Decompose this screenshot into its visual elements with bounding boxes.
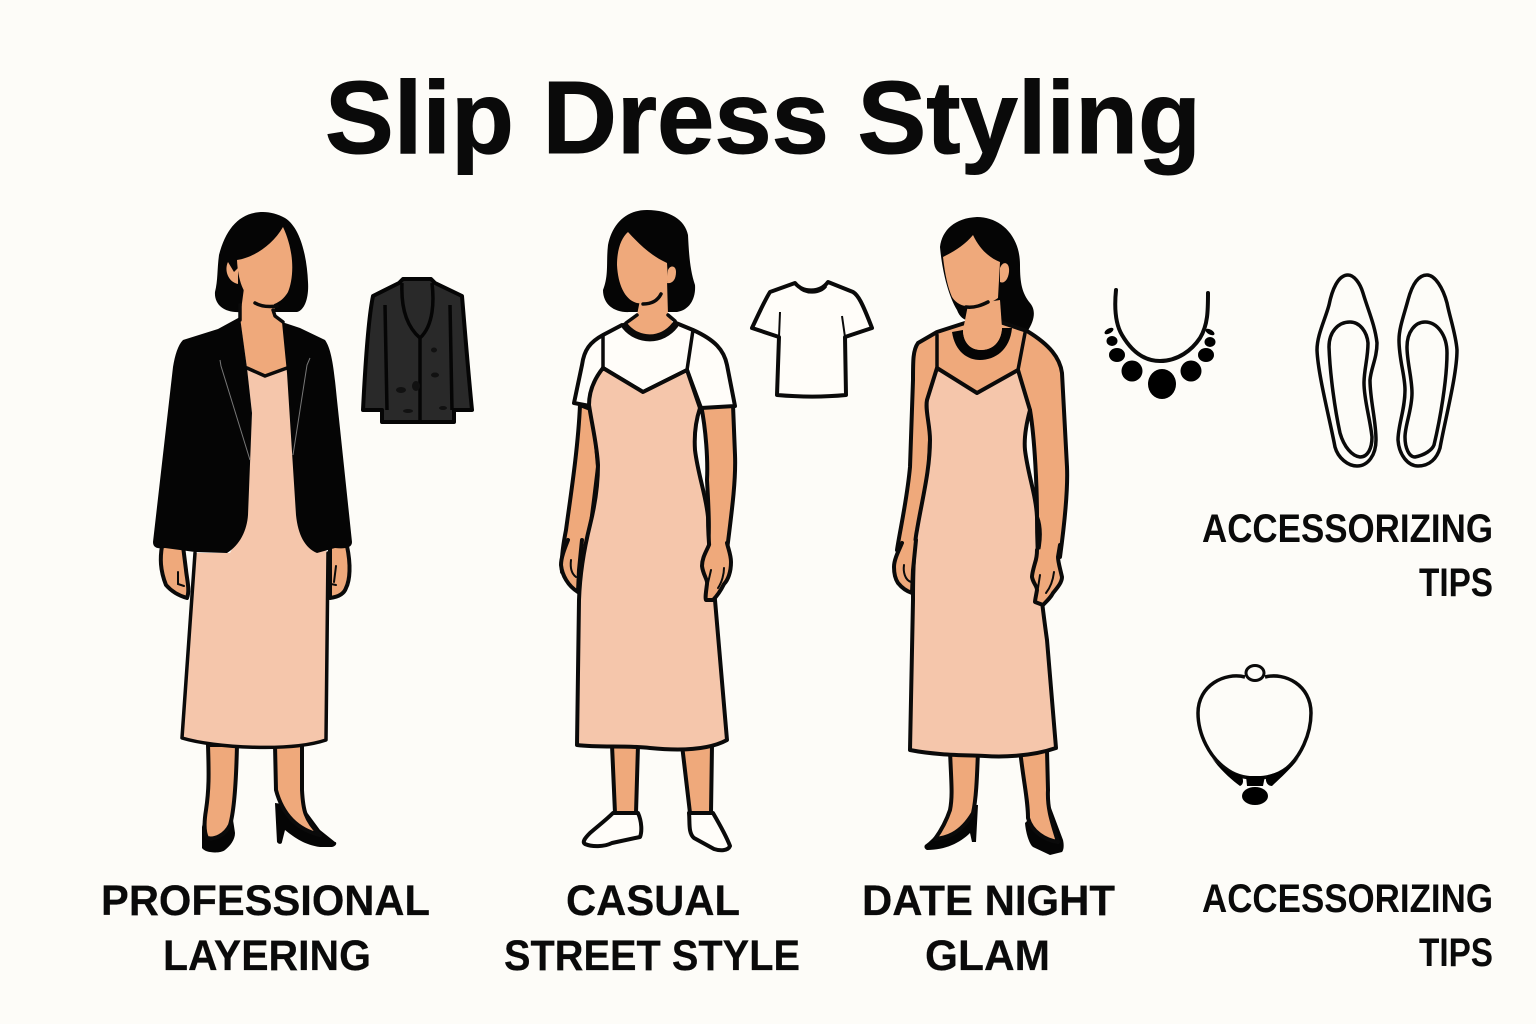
- t-shirt: [574, 323, 735, 408]
- icon: statement necklace: [1103, 290, 1216, 399]
- ear: [226, 262, 238, 284]
- right hand fingers: [331, 566, 336, 585]
- icon: pendant necklace: [1198, 666, 1311, 805]
- neck and chest: [240, 288, 287, 376]
- ear: [1000, 263, 1009, 283]
- left hand fingers: [178, 572, 184, 586]
- jaw line: [643, 294, 661, 304]
- lapels and seams: [385, 283, 452, 422]
- right hand: [702, 543, 731, 600]
- right hand fingers: [708, 568, 724, 588]
- slip dress: [577, 368, 727, 750]
- figure: professional layering: [153, 212, 352, 852]
- arms: [562, 405, 735, 572]
- face: [237, 227, 292, 305]
- face: [617, 232, 668, 303]
- left shoe: [1317, 275, 1377, 466]
- lapel highlights: [220, 358, 310, 460]
- body and arms: [897, 322, 1067, 560]
- right shoe: [1398, 275, 1457, 466]
- label: accessorizing tips lower: ACCESSORIZING: [1202, 877, 1493, 921]
- label: accessorizing tips lower: TIPS: [1419, 931, 1493, 975]
- label: date night glam: DATE NIGHT: [862, 877, 1115, 925]
- right hand: [1032, 545, 1062, 605]
- right pump: [275, 803, 336, 847]
- left hand: [561, 540, 582, 592]
- left leg: [935, 750, 978, 839]
- bead right outer: [1204, 337, 1216, 347]
- label: date night glam: [862, 877, 1115, 980]
- bead right top: [1204, 327, 1216, 337]
- right hand: [330, 546, 350, 598]
- bead left top: [1103, 326, 1115, 336]
- left hand: [161, 546, 188, 598]
- label: accessorizing tips upper: TIPS: [1419, 561, 1493, 605]
- label: date night glam: GLAM: [925, 932, 1050, 980]
- label: accessorizing tips lower: [1202, 877, 1493, 975]
- left hand fingers: [904, 565, 911, 582]
- title: Slip Dress Styling: [325, 60, 1201, 175]
- t-shirt collar: [625, 325, 675, 338]
- bead right inner: [1180, 360, 1202, 382]
- neck: [626, 280, 674, 335]
- jaw line: [255, 303, 277, 307]
- straps: [937, 333, 1025, 370]
- label: professional layering: [101, 877, 430, 980]
- left hand: [894, 540, 916, 593]
- icon: flat shoes: [1317, 275, 1457, 466]
- jacket left panel: [153, 317, 252, 553]
- label: accessorizing tips upper: [1202, 507, 1493, 605]
- necklace ring: [1198, 676, 1311, 778]
- figure: casual street style: [561, 210, 735, 850]
- neckline: [247, 368, 287, 376]
- left leg: [205, 745, 237, 838]
- clasp: [1246, 666, 1264, 680]
- bead left inner: [1122, 360, 1142, 382]
- pendant stone: [1242, 787, 1268, 805]
- dress skirt outline: [182, 553, 328, 747]
- dark marks: [396, 348, 447, 413]
- left pump: [202, 800, 235, 852]
- jaw line: [966, 302, 988, 307]
- dress: [182, 368, 328, 747]
- hair: [603, 210, 695, 312]
- neck outline: [240, 305, 283, 322]
- ear: [667, 266, 676, 283]
- neck: [963, 300, 1002, 350]
- bead right middle: [1198, 348, 1214, 362]
- slip dress: [910, 368, 1056, 756]
- neck outline: [626, 315, 675, 323]
- right heel: [1025, 800, 1064, 855]
- figure: date night glam: [894, 217, 1067, 855]
- jacket right panel: [282, 322, 352, 553]
- label: casual street style: CASUAL: [566, 877, 740, 925]
- straps: [603, 330, 693, 370]
- label: accessorizing tips upper: ACCESSORIZING: [1202, 507, 1493, 551]
- hair: [215, 212, 308, 312]
- beads: [1148, 369, 1176, 399]
- bead left middle: [1109, 348, 1125, 362]
- left heel: [924, 803, 978, 850]
- chain: [1115, 290, 1208, 361]
- icon: t-shirt: [752, 282, 872, 396]
- label: casual street style: [504, 877, 800, 980]
- bead left outer: [1106, 336, 1118, 346]
- label: professional layering: LAYERING: [163, 932, 371, 980]
- label: professional layering: PROFESSIONAL: [101, 877, 430, 925]
- white sneakers: [584, 813, 730, 850]
- right leg: [275, 745, 320, 835]
- label: casual street style: STREET STYLE: [504, 932, 800, 980]
- collar: [799, 286, 826, 292]
- beads: [1212, 758, 1299, 786]
- side seams: [779, 312, 845, 337]
- legs: [612, 745, 712, 813]
- choker necklace: [952, 328, 1012, 360]
- left hand fingers: [571, 560, 576, 577]
- face: [943, 235, 1000, 306]
- hair: [940, 217, 1034, 332]
- right hand fingers: [1038, 572, 1054, 593]
- right leg: [1020, 750, 1058, 842]
- icon: blazer: [363, 279, 472, 422]
